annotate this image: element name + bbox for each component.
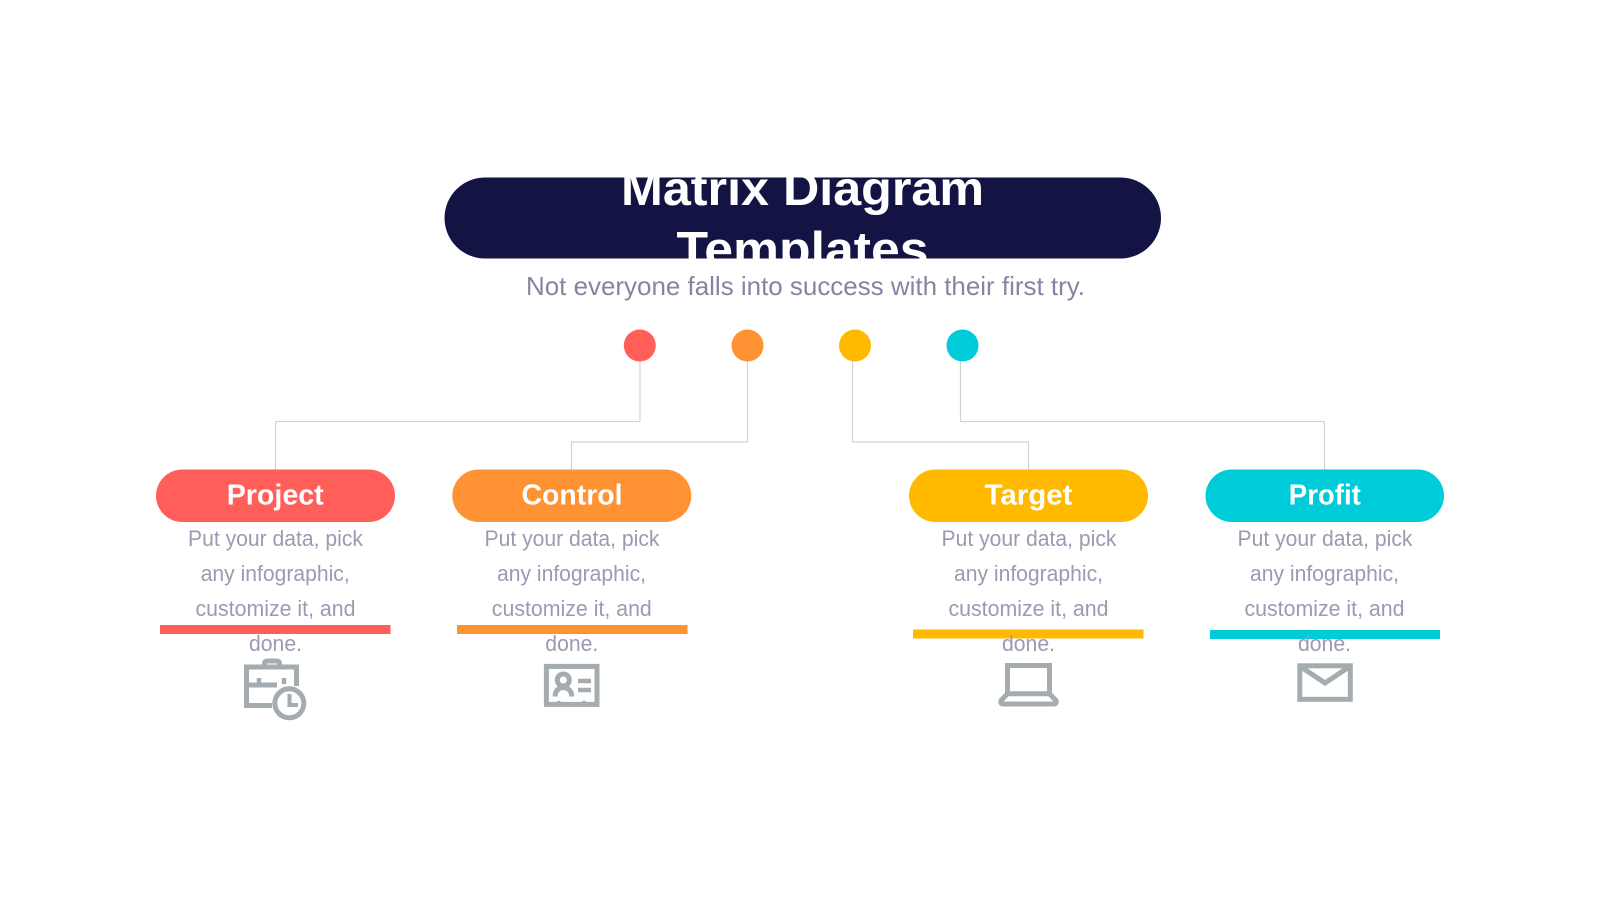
- profit pill: [1206, 470, 1444, 522]
- project text: customize it, and: [196, 596, 356, 621]
- control text: customize it, and: [492, 596, 652, 621]
- title banner: [444, 178, 1161, 258]
- target text: [942, 526, 1117, 656]
- connector: project: [276, 361, 640, 470]
- project text: done.: [249, 631, 302, 656]
- control text: Put your data, pick: [484, 526, 660, 551]
- profit bar: [1210, 630, 1440, 639]
- connector: control: [572, 361, 748, 470]
- subtitle: Not everyone falls into success with their first try.: [526, 271, 1085, 301]
- target text: Put your data, pick: [942, 526, 1117, 551]
- connector: target: [852, 361, 1028, 470]
- target text: any infographic,: [954, 561, 1103, 586]
- control label: Control: [522, 480, 622, 512]
- icon: briefcase with clock: [246, 661, 304, 718]
- icon: envelope: [1300, 666, 1350, 699]
- panel: project: [156, 470, 395, 718]
- profit text: Put your data, pick: [1238, 526, 1413, 551]
- dot: target: [839, 330, 871, 362]
- title banner: Templates: [676, 223, 928, 277]
- project pill: [156, 470, 395, 522]
- project label: Project: [227, 480, 324, 512]
- target text: customize it, and: [948, 596, 1108, 621]
- dot: control: [732, 330, 764, 362]
- profit text: any infographic,: [1250, 561, 1399, 586]
- project text: [188, 526, 364, 656]
- panel: profit: [1206, 470, 1444, 699]
- target text: done.: [1002, 631, 1055, 656]
- connector: profit: [960, 361, 1324, 470]
- dot: profit: [946, 330, 978, 362]
- panel: control: [452, 470, 691, 705]
- profit text: customize it, and: [1244, 596, 1404, 621]
- project text: Put your data, pick: [188, 526, 364, 551]
- profit text: [1238, 526, 1413, 656]
- project bar: [160, 625, 390, 634]
- target pill: [909, 470, 1148, 522]
- control text: [484, 526, 660, 656]
- project text: any infographic,: [201, 561, 350, 586]
- control text: any infographic,: [497, 561, 646, 586]
- control pill: [452, 470, 691, 522]
- control bar: [457, 625, 688, 634]
- target bar: [913, 630, 1144, 638]
- profit label: Profit: [1289, 480, 1361, 512]
- profit text: done.: [1298, 631, 1351, 656]
- panel: target: [909, 470, 1148, 704]
- title banner: Matrix Diagram: [621, 163, 984, 216]
- icon: laptop: [1001, 666, 1056, 704]
- icon: id card: [546, 666, 597, 705]
- dot: project: [624, 330, 656, 362]
- control text: done.: [545, 631, 598, 656]
- target label: Target: [984, 480, 1073, 512]
